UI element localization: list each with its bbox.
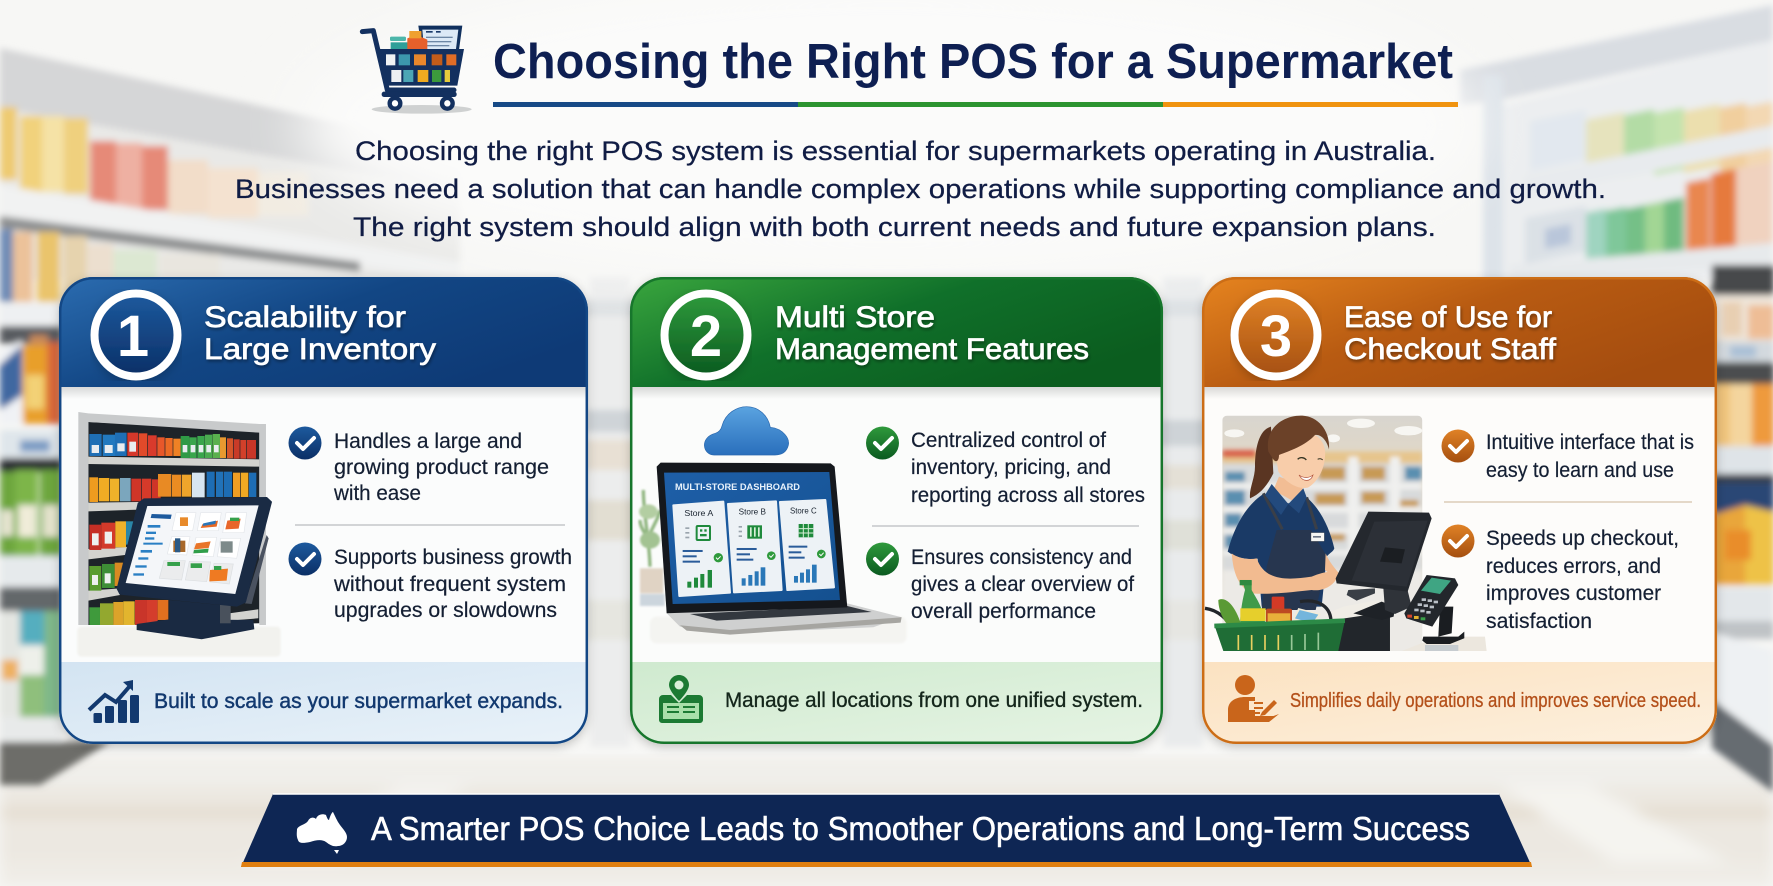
panel 3 header: [1202, 277, 1717, 387]
bullet text 1b: without frequent system: [333, 573, 566, 596]
bullet text 2b: overall performance: [911, 600, 1096, 623]
products row 1: [89, 433, 256, 459]
bullet text 2a: [911, 429, 1145, 507]
icon: location pin on store list: [659, 675, 703, 723]
bullet text 2a: reporting across all stores: [911, 484, 1145, 507]
bullet text 3b: satisfaction: [1486, 610, 1592, 633]
panel 2 heading: Multi Store: [775, 301, 935, 334]
panel: scalability for large inventory: [59, 277, 588, 744]
bullet text 1a: Handles a large and: [334, 430, 522, 453]
icon: Australia map: [297, 812, 347, 854]
check icon 1a: [288, 426, 322, 460]
number badge 3: 3: [1260, 304, 1292, 369]
cashier neck and collar: [1265, 477, 1307, 515]
number badge 1: 1: [117, 304, 149, 369]
cart wheels: [390, 98, 453, 109]
number badge 1: [94, 294, 178, 376]
laptop base: [666, 603, 902, 635]
number badge 2: [664, 294, 748, 376]
bullet text 3a: [1486, 431, 1694, 482]
panel 1 footer text: Built to scale as your supermarket expands.: [154, 690, 563, 713]
store photo backdrop: [1222, 416, 1422, 652]
cashier shirt: [1228, 493, 1334, 607]
bullet text 2a: inventory, pricing, and: [911, 456, 1111, 479]
panel 3 heading: [1344, 301, 1557, 366]
panel 2 heading: [775, 301, 1089, 366]
card reader: [1404, 575, 1464, 644]
receipt: [418, 26, 462, 50]
laptop lid: [657, 463, 847, 613]
icon: growth chart: [89, 680, 139, 723]
ponytail: [1250, 427, 1273, 498]
dashboard title: MULTI-STORE DASHBOARD: [675, 482, 800, 492]
left shelves: [0, 48, 460, 785]
bullet text 3a: easy to learn and use: [1486, 459, 1674, 482]
centre wash: [300, 0, 1480, 275]
bullet text 3b: reduces errors, and: [1486, 555, 1661, 578]
panel 2 footer text: Manage all locations from one unified system.: [725, 689, 1143, 712]
panel 3 footer band: [1202, 662, 1717, 744]
bullet text 3a: Intuitive interface that is: [1486, 431, 1694, 454]
panel 2 footer band: [630, 662, 1163, 744]
illustration: cashier at checkout: [1205, 416, 1487, 652]
POS stand: [137, 600, 254, 639]
POS screen: [117, 498, 271, 606]
panel 2 heading: Management Features: [775, 333, 1089, 366]
cashier face: [1276, 435, 1325, 488]
POS monitor: [1336, 512, 1432, 620]
bullet text 1b: [333, 546, 572, 622]
number badge 2: 2: [690, 304, 722, 369]
panel 1 heading: [204, 301, 436, 366]
bullet text 1a: with ease: [333, 482, 421, 505]
logo: shopping cart: [362, 26, 472, 114]
bullet text 1b: upgrades or slowdowns: [334, 599, 557, 622]
panel 3 footer text: Simplifies daily operations and improves service speed.: [1290, 690, 1701, 712]
bullet text 3b: Speeds up checkout,: [1486, 527, 1679, 550]
counter: [77, 627, 281, 657]
cloud: [704, 407, 789, 455]
shelf boards: [88, 457, 259, 621]
store A card: [673, 502, 730, 596]
illustration: cloud and laptop dashboard: [639, 407, 907, 643]
floor: [0, 760, 1773, 886]
number badge 3: [1234, 294, 1318, 376]
panel 2 header: [630, 277, 1163, 387]
panel: ease of use for checkout staff: [1202, 277, 1717, 744]
right shelves: [1460, 5, 1773, 792]
panel 1 footer band: [59, 662, 588, 744]
title underline: [493, 102, 1458, 107]
cart frame: [362, 31, 464, 90]
bullet text 2a: Centralized control of: [911, 429, 1106, 452]
bullet text 1a: [333, 430, 549, 505]
panel 3 heading: Ease of Use for: [1344, 301, 1552, 334]
blurred plant: [639, 490, 665, 606]
panel 3 heading: Checkout Staff: [1344, 333, 1557, 366]
bottom banner: [241, 794, 1532, 867]
cashier hair: [1268, 416, 1329, 461]
check icon 2b: [866, 542, 899, 576]
title: Choosing the Right POS for a Supermarket: [493, 35, 1453, 89]
check icon 3b: [1442, 524, 1474, 558]
store B card: [728, 501, 782, 592]
store C card: [780, 500, 834, 590]
store B card: Store B: [739, 507, 766, 517]
bullet text 2b: [911, 546, 1134, 623]
intro text: The right system should align with both current needs and future expansion plans.: [353, 212, 1436, 242]
cashier smile and eyes: [1298, 458, 1323, 480]
bullet text 2b: gives a clear overview of: [911, 573, 1134, 596]
bullet text 3b: [1486, 527, 1679, 633]
cashier arm: [1232, 553, 1339, 594]
products row 2: [89, 472, 256, 502]
intro text: Businesses need a solution that can handle complex operations while supporting compliance and growth.: [235, 174, 1606, 204]
cashier name badge: [1311, 533, 1324, 541]
panel 1 header: [59, 277, 588, 387]
intro text: [235, 136, 1606, 242]
icon: staff with checklist: [1228, 675, 1279, 722]
banner text: A Smarter POS Choice Leads to Smoother Operations and Long-Term Success: [371, 810, 1470, 847]
panel 1 heading: Scalability for: [204, 301, 406, 334]
products rows 3 to 5: [89, 521, 168, 625]
cashier apron: [1262, 493, 1327, 610]
check icon 3a: [1442, 430, 1474, 462]
bullet text 1a: growing product range: [334, 456, 549, 479]
bullet text 2b: Ensures consistency and: [911, 546, 1132, 569]
check icon 2a: [866, 426, 899, 460]
store A card: Store A: [684, 508, 714, 518]
gaps between cards: [586, 277, 1206, 747]
store C card: Store C: [790, 505, 817, 515]
checkout counter: [1323, 600, 1487, 651]
bullet text 1b: Supports business growth: [334, 546, 572, 569]
panel: multi store management features: [630, 277, 1163, 744]
bullet text 3b: improves customer: [1486, 582, 1661, 605]
panel 1 heading: Large Inventory: [204, 333, 436, 366]
illustration: store shelf with POS terminal: [77, 412, 281, 657]
shopping basket with groceries: [1205, 580, 1345, 651]
intro text: Choosing the right POS system is essential for supermarkets operating in Australia.: [355, 136, 1436, 166]
check icon 1b: [288, 542, 322, 576]
